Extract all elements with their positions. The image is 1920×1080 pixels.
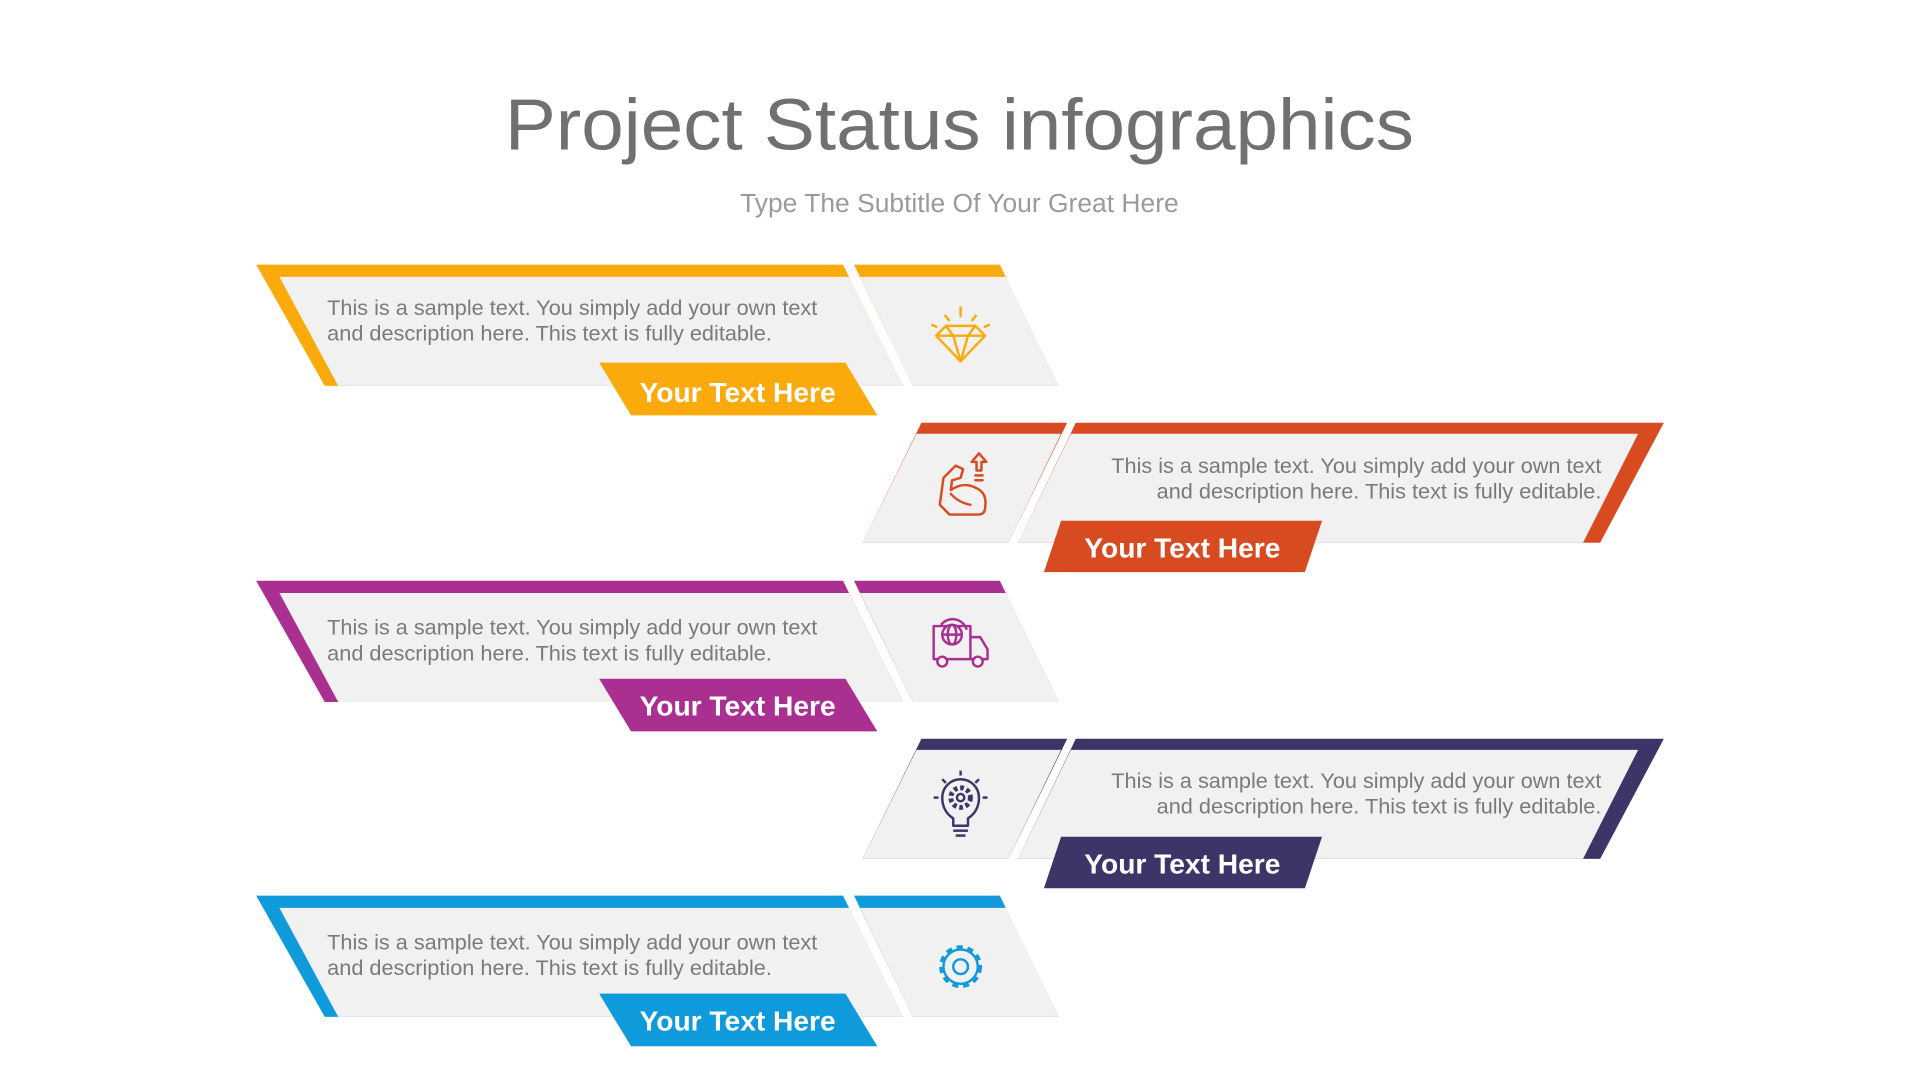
panel: row 1 yellow: [256, 265, 1059, 415]
icon: diamond: [931, 306, 990, 361]
icon: gear: [941, 947, 980, 986]
tab 5: Your Text Here: [640, 1004, 836, 1036]
body text 4: This is a sample text. You simply add your own text: [1111, 770, 1602, 793]
tab 2: Your Text Here: [1084, 531, 1280, 563]
icon: delivery truck with globe: [934, 619, 988, 667]
subtitle: Type The Subtitle Of Your Great Here: [740, 190, 1179, 218]
tab 4: [1044, 837, 1322, 888]
body text 2: and description here. This text is fully editable.: [1157, 481, 1601, 504]
panel: row 2 orange: [863, 423, 1664, 572]
panel: row 5 blue: [256, 896, 1059, 1046]
panel: row 3 magenta: [256, 581, 1059, 731]
icon: muscle arm: [940, 453, 986, 515]
icon: lightbulb gear: [934, 771, 988, 836]
body text 5: This is a sample text. You simply add your own text: [327, 932, 817, 955]
tab 3: Your Text Here: [640, 690, 836, 722]
tab 1: [599, 363, 877, 415]
body text 4: and description here. This text is fully editable.: [1157, 796, 1601, 819]
tab 1: Your Text Here: [640, 376, 836, 408]
body text 5: and description here. This text is fully editable.: [327, 957, 772, 980]
tab 4: Your Text Here: [1084, 848, 1280, 880]
body text 1: This is a sample text. You simply add your own text: [327, 297, 817, 320]
title: Project Status infographics: [505, 85, 1414, 165]
tab 3: [599, 679, 877, 731]
body text 2: This is a sample text. You simply add your own text: [1111, 455, 1602, 478]
body text 3: and description here. This text is fully editable.: [327, 642, 772, 665]
body text 3: This is a sample text. You simply add your own text: [327, 617, 817, 640]
tab 2: [1044, 521, 1322, 572]
tab 5: [599, 994, 877, 1046]
body text 1: and description here. This text is fully editable.: [327, 323, 772, 346]
panel: row 4 purple: [863, 739, 1664, 888]
